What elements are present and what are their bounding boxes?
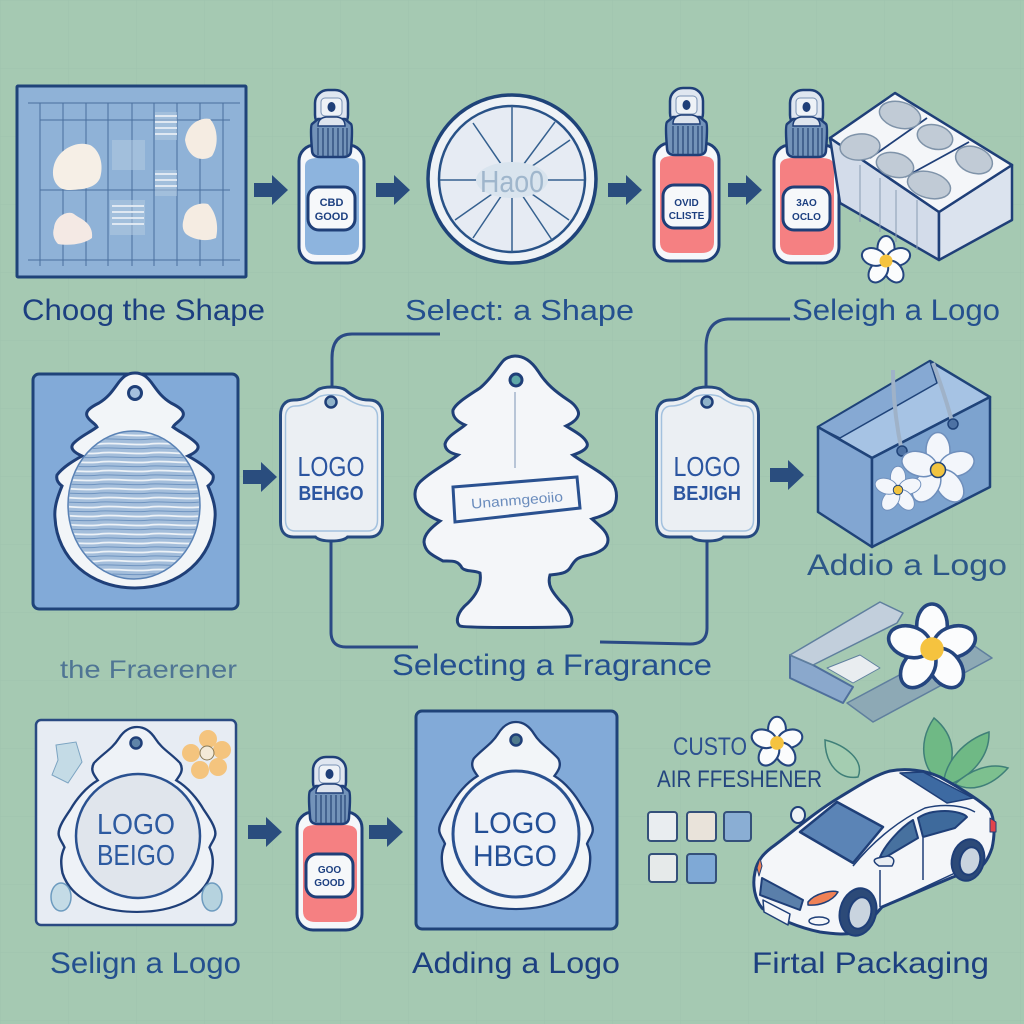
icon: blue spray bottle: GOOD bbox=[315, 211, 348, 223]
icon: pink spray bottle small label bbox=[297, 757, 362, 930]
tag: logo left: BEHGO bbox=[298, 483, 364, 505]
sheet flower bbox=[182, 730, 231, 779]
panel: adding logo: HBGO bbox=[473, 840, 557, 873]
icon: pink spray bottle small label: GOOD bbox=[314, 878, 345, 889]
panel: shape template grid bbox=[17, 86, 246, 277]
arrow 1 bbox=[254, 175, 288, 205]
icon: tray box bbox=[830, 93, 1012, 260]
icon: round disc bbox=[428, 95, 596, 263]
bag flowers bbox=[873, 432, 977, 514]
tag: logo right bbox=[656, 387, 758, 541]
arrow 6 bbox=[770, 460, 804, 490]
label: design a logo: Seleigh a Logo bbox=[792, 294, 1000, 327]
panel: adding logo: LOGO bbox=[473, 807, 557, 840]
tag: logo right: LOGO bbox=[674, 451, 740, 482]
icon: tree air freshener bbox=[415, 356, 616, 628]
heading: custom air freshener: CUSTO bbox=[673, 733, 747, 761]
tag: logo left bbox=[280, 387, 382, 541]
connector: lower right bbox=[600, 540, 707, 644]
arrow 3 bbox=[608, 175, 642, 205]
label: the fragrance: the Fraerener bbox=[60, 656, 237, 684]
icon: round disc: Hao0 bbox=[480, 164, 544, 199]
icon: small flower bbox=[860, 236, 912, 286]
connector: lower left bbox=[331, 540, 418, 647]
logo band: Unanmgeoiio bbox=[471, 488, 564, 512]
logo band bbox=[453, 477, 580, 522]
label: choose shape: Choog the Shape bbox=[22, 294, 265, 327]
arrow 2 bbox=[376, 175, 410, 205]
panel: logo design sheet: LOGO bbox=[97, 809, 175, 841]
label: adding a logo bottom: Adding a Logo bbox=[412, 947, 620, 980]
icon: flat package with flower bbox=[790, 602, 992, 722]
ornament bbox=[55, 373, 215, 588]
panel: logo design sheet bbox=[36, 720, 236, 925]
icon: pink spray bottle: CLISTE bbox=[669, 211, 705, 222]
heading: custom air freshener: AIR FFESHENER bbox=[657, 766, 822, 793]
tag: logo left: LOGO bbox=[298, 451, 364, 482]
icon: pink spray bottle with logo: 3AO bbox=[796, 198, 817, 209]
icon: leaves bbox=[825, 718, 1008, 788]
shape: flower blob bbox=[53, 144, 102, 190]
swatches bbox=[648, 812, 751, 883]
wheels bbox=[834, 836, 989, 940]
label: adding a logo: Addio a Logo bbox=[807, 549, 1007, 582]
icon: shopping bag bbox=[818, 361, 990, 547]
shape: oval blob bbox=[185, 119, 217, 159]
panel: logo design sheet: BEIGO bbox=[97, 840, 175, 872]
icon: pink spray bottle with logo: OCLO bbox=[792, 212, 821, 223]
shape: small blob bbox=[53, 213, 92, 245]
label: final packaging: Firtal Packaging bbox=[752, 947, 989, 980]
icon: blue spray bottle bbox=[299, 90, 364, 263]
label: select a shape: Select: a Shape bbox=[405, 295, 634, 327]
icon: pink spray bottle: OVID bbox=[674, 198, 699, 209]
icon: blue spray bottle: CBD bbox=[320, 197, 343, 209]
connector: upper left bbox=[332, 334, 440, 396]
icon: pink spray bottle with logo bbox=[774, 90, 839, 263]
arrow 4 bbox=[728, 175, 762, 205]
tag: logo right: BEJIGH bbox=[673, 483, 741, 505]
panel: adding logo bbox=[416, 711, 617, 929]
label: select a logo: Selign a Logo bbox=[50, 947, 241, 980]
heading: custom air freshener bbox=[657, 717, 822, 793]
icon: pink spray bottle bbox=[654, 88, 719, 261]
connector: upper right bbox=[706, 319, 790, 396]
arrow 7 bbox=[248, 817, 282, 847]
panel: fragrance pad bbox=[33, 373, 238, 609]
shape: square blob bbox=[183, 204, 217, 240]
arrow 8 bbox=[369, 817, 403, 847]
label: selecting a fragrance: Selecting a Fragrance bbox=[392, 649, 712, 682]
arrow 5 bbox=[243, 462, 277, 492]
icon: car bbox=[754, 770, 996, 940]
icon: pink spray bottle small label: GOO bbox=[318, 865, 341, 876]
